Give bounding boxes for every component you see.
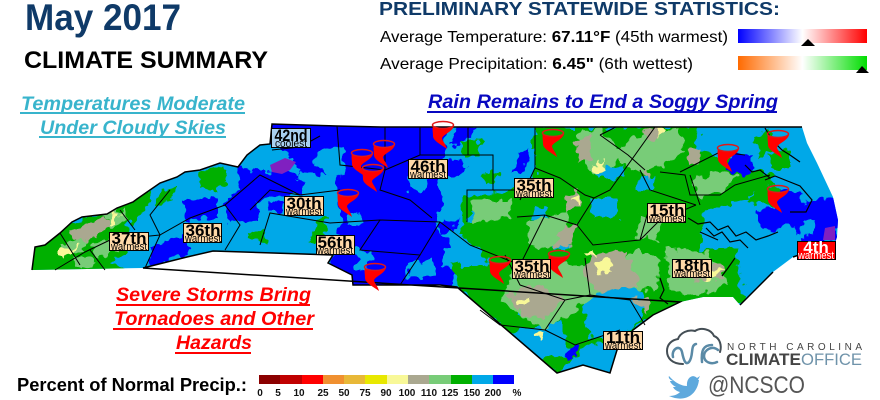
rank label: 46th warmest: warmest — [409, 169, 446, 181]
tornado markers — [338, 122, 789, 291]
headline: severe storms: Hazards — [176, 333, 252, 354]
subtitle: CLIMATE SUMMARY — [24, 47, 268, 74]
temperature gauge — [738, 29, 867, 46]
east cyan breaks — [457, 164, 656, 360]
central blue — [265, 120, 452, 290]
rank label: 42nd coolest: coolest — [275, 138, 307, 150]
legend labels: 25 — [317, 388, 329, 399]
east blue — [564, 150, 838, 358]
headline: temperatures: Under Cloudy Skies — [40, 118, 226, 139]
gray tracts — [505, 128, 722, 318]
rank label: 4th warmest: 4th — [803, 238, 829, 257]
rank label: 37th warmest: warmest — [110, 241, 147, 253]
rank label: 11th warmest: 11th — [606, 328, 640, 347]
rank label: 37th warmest: 37th — [112, 229, 146, 248]
rank label: 15th warmest: warmest — [648, 213, 685, 225]
legend labels: 50 — [338, 388, 350, 399]
rank label: 30th warmest: warmest — [285, 206, 322, 218]
icon: twitter bird — [669, 376, 700, 399]
rank label: 18th warmest: 18th — [675, 256, 709, 275]
rank label: 36th warmest: 36th — [186, 221, 220, 240]
purple maximum patches — [270, 158, 835, 240]
rank label: 35th warmest south: warmest — [513, 269, 550, 281]
legend labels: 0 — [257, 388, 263, 399]
legend title: Percent of Normal Precip.: — [17, 375, 247, 395]
rank label: 15th warmest: 15th — [650, 201, 684, 220]
yellow tracts — [518, 128, 722, 342]
state precipitation map — [20, 115, 850, 380]
rank label: 35th warmest: 35th — [517, 176, 551, 195]
headline: severe storms: Severe Storms Bring — [116, 285, 311, 306]
rank label: 4th warmest — [797, 238, 836, 262]
headline: temperatures: Temperatures Moderate — [21, 94, 245, 115]
twitter handle: @NCSCO — [708, 372, 805, 399]
climate office wordmark: OFFICE — [801, 350, 862, 369]
legend labels: 5 — [275, 388, 281, 399]
rank label: 56th warmest: warmest — [316, 245, 353, 257]
state outline — [32, 124, 835, 373]
legend labels: 125 — [442, 388, 459, 399]
precipitation gauge — [738, 56, 869, 73]
east green — [450, 127, 748, 375]
rank label: 35th warmest south: 35th — [515, 257, 549, 276]
temperature statistic: Average Temperature: 67.11°F (45th warmest) — [380, 29, 728, 46]
rank label: 11th warmest: warmest — [604, 340, 641, 352]
legend labels — [257, 388, 522, 399]
legend labels: % — [513, 388, 522, 399]
rank label: 42nd coolest: 42nd — [274, 126, 308, 145]
rank label: 30th warmest: 30th — [287, 194, 321, 213]
rank label: 35th warmest: warmest — [515, 188, 552, 200]
west green — [32, 190, 152, 270]
mountain tracts — [70, 218, 112, 242]
light green tracts — [578, 128, 685, 178]
legend labels: 75 — [359, 388, 371, 399]
legend labels: 10 — [293, 388, 305, 399]
rank label: 42nd coolest — [272, 126, 310, 150]
rank label: 46th warmest: 46th — [411, 157, 445, 176]
headline: temperatures — [20, 94, 245, 139]
headline: severe storms — [113, 285, 316, 354]
headline: rain: Rain Remains to End a Soggy Spring — [428, 92, 778, 113]
rank label: 36th warmest: warmest — [184, 233, 221, 245]
legend labels: 90 — [380, 388, 392, 399]
legend colour bar — [259, 375, 514, 384]
icon: climate office cloud logo — [667, 329, 721, 364]
rank label: 11th warmest — [604, 328, 642, 352]
legend labels: 200 — [485, 388, 502, 399]
legend labels: 110 — [421, 388, 438, 399]
legend labels: 150 — [464, 388, 481, 399]
legend labels: 100 — [399, 388, 416, 399]
rank label: 56th warmest: 56th — [318, 233, 352, 252]
county lines — [55, 126, 770, 345]
climate office wordmark: CLIMATE — [726, 350, 801, 369]
headline: severe storms: Tornadoes and Other — [114, 309, 316, 330]
climate office wordmark: NORTH CAROLINA — [727, 342, 862, 353]
precipitation statistic: Average Precipitation: 6.45" (6th wettest) — [380, 56, 693, 73]
rank label: 18th warmest: warmest — [673, 268, 710, 280]
sound shoreline detail — [660, 128, 812, 304]
rank label: 4th warmest: warmest — [797, 250, 834, 262]
climate office wordmark — [726, 342, 862, 369]
